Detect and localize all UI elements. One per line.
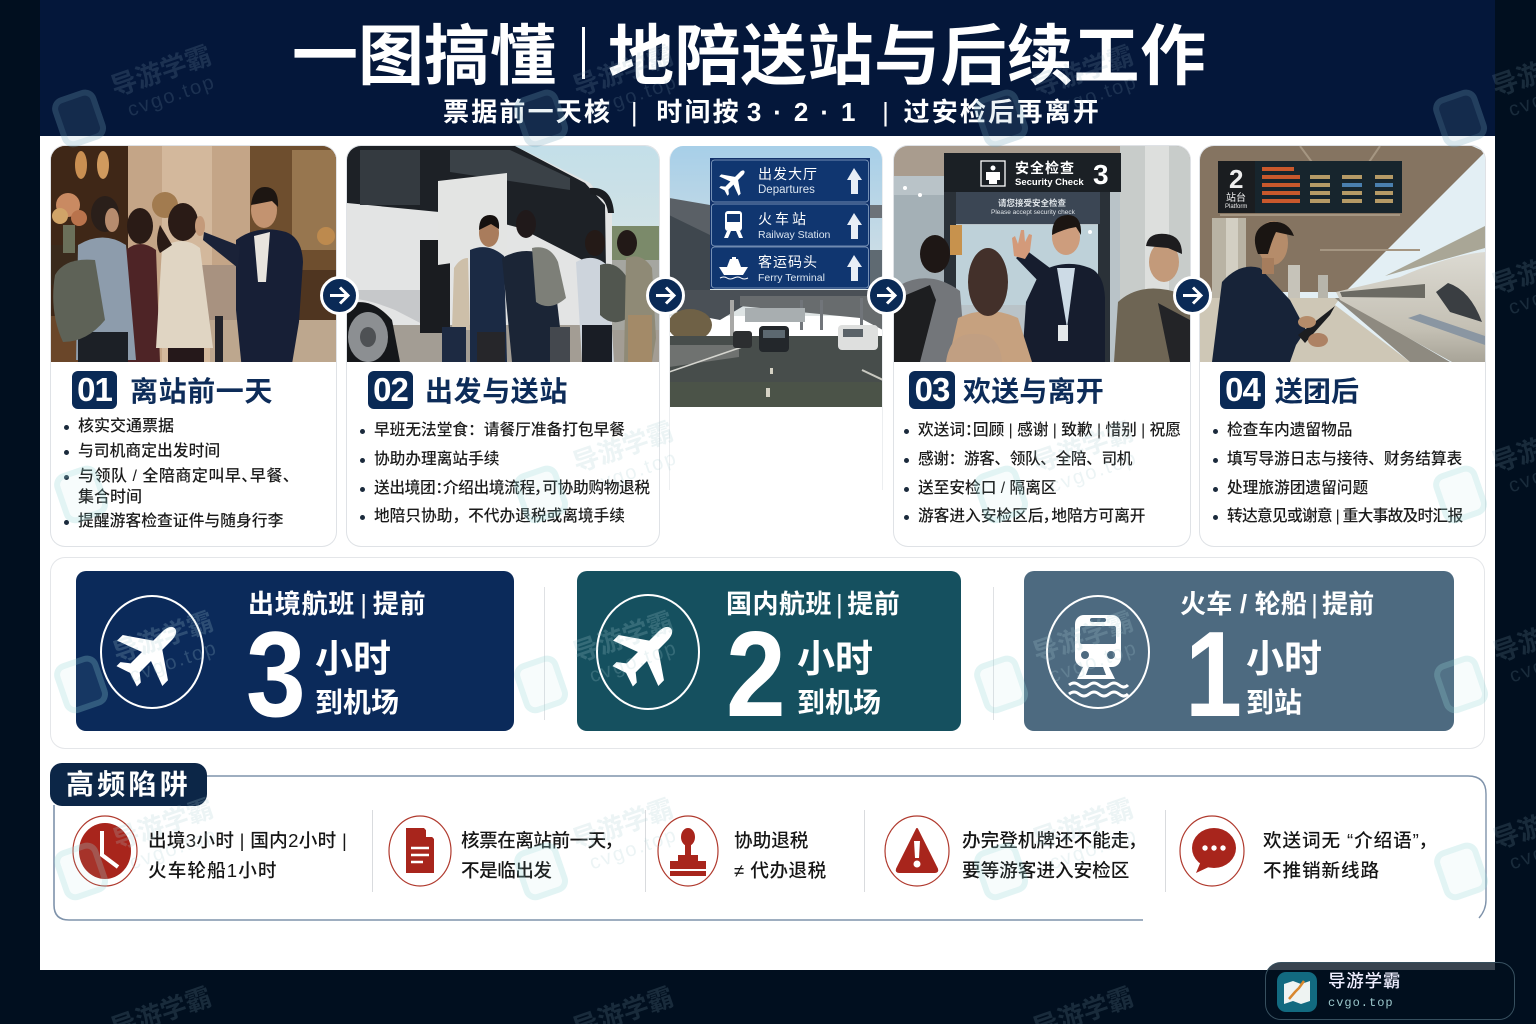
watermark row 3 c: cvgo.top (1047, 637, 1141, 687)
man 2 backpack (502, 251, 564, 362)
checklist: 集合时间 (78, 489, 142, 506)
pitfall 5 (1179, 815, 1430, 887)
watermark top 1: 导游学霸 (107, 40, 215, 102)
brand badge (1265, 962, 1515, 1020)
subtitle: | (882, 97, 889, 127)
watermark top 1: cvgo.top (125, 71, 219, 121)
number 1: 1 (1185, 606, 1242, 742)
destination: 到站 (1246, 687, 1302, 718)
watermark row 4 d (1424, 780, 1536, 930)
watermark row 2 a: 导游学霸 (569, 416, 677, 478)
photo: airport road with direction signs: Departures (758, 184, 815, 196)
photo: guide briefing group in hotel lobby (51, 146, 336, 362)
watermark row 3 c (964, 593, 1158, 743)
text (461, 830, 615, 881)
watermark top 2: 导游学霸 (569, 40, 677, 102)
heading: 出发与送站 (425, 376, 568, 407)
text (1263, 830, 1430, 881)
checklist (1213, 421, 1463, 525)
checklist: 感谢：游客、领队、全陪、司机 (918, 451, 1132, 468)
watermark row 3 b (504, 593, 698, 743)
dividers (372, 810, 373, 892)
woman (948, 311, 1032, 362)
man (76, 238, 136, 360)
badge 01: 01 (77, 371, 112, 408)
checklist: 送至安检口 / 隔离区 (918, 480, 1057, 497)
number 2: 2 (726, 606, 786, 742)
photo: guide waving at security check (894, 146, 1190, 362)
watermark top 2: cvgo.top (587, 71, 681, 121)
checklist (360, 421, 650, 525)
text: 火车轮船1小时 (148, 860, 278, 881)
photo: guide on train platform with tablet (1200, 146, 1485, 362)
guide (1022, 264, 1105, 362)
checklist: 核实交通票据 (78, 418, 174, 435)
time card: international flights 3 hours (76, 571, 514, 731)
suitcase (215, 316, 223, 362)
watermark row 2 b: cvgo.top (1047, 447, 1141, 497)
pitfall 1 (72, 815, 347, 887)
checklist: 送出境团：介绍出境流程，可协助购物退税 (374, 480, 650, 497)
photo: guide waving at security check: 安全检查 (1015, 160, 1075, 176)
watermark row 4 b: 导游学霸 (569, 793, 677, 855)
guide (236, 229, 303, 370)
photo: guide waving at security check: 请您接受安全检查 (998, 198, 1067, 208)
icon: plane (100, 595, 204, 709)
photo: guide waving at security check: Security Check (1015, 177, 1084, 188)
badge 02: 02 (373, 371, 408, 408)
watermark row 2 d (44, 403, 238, 553)
left man (896, 278, 966, 362)
checklist: 欢送词：回顾 | 感谢 | 致歉 | 惜别 | 祝愿 (918, 422, 1181, 439)
watermark row 4 a: cvgo.top (127, 824, 221, 874)
photo: guide on train platform with tablet: Platform (1225, 204, 1247, 210)
watermark row 4 c: cvgo.top (1047, 824, 1141, 874)
subtitle: | (631, 97, 638, 127)
text (734, 830, 827, 881)
photo: group boarding coach (347, 146, 659, 362)
woman cream (168, 340, 204, 362)
card 04: after the group leaves (1200, 146, 1485, 546)
title: 一图搞懂 地陪送站与后续工作 (292, 19, 1206, 93)
panel: common pitfalls (53, 775, 1487, 921)
icon: clock (72, 815, 138, 887)
text: 协助退税 (734, 830, 808, 851)
checklist: 填写导游日志与接待、财务结算表 (1227, 451, 1462, 468)
arrow 1 (320, 276, 359, 315)
text: 出境3小时 | 国内2小时 | (148, 830, 347, 851)
watermark row 4 c (964, 780, 1158, 930)
pitfalls tag: 高频陷阱 (66, 769, 191, 800)
icon: speech bubble (1179, 815, 1245, 887)
pitfall 4 (884, 815, 1139, 887)
sign group (710, 158, 870, 289)
panel: road signs photo (669, 146, 883, 490)
man navy (452, 258, 470, 330)
label: 火车 / 轮船|提前 (1180, 589, 1374, 619)
subtitle: 票据前一天核 时间按3·2·1 过安检后再离开 (443, 97, 1101, 127)
checklist: 游客进入安检区后，地陪方可离开 (918, 508, 1145, 525)
pitfall 2 (388, 815, 615, 887)
label: 出境航班|提前 (248, 589, 426, 619)
checklist: 协助办理离站手续 (374, 451, 500, 468)
cars (759, 326, 789, 352)
white content panel (40, 136, 1495, 970)
icon: brand map (1277, 972, 1317, 1012)
watermark row 3 a: 导游学霸 (109, 606, 217, 668)
brand name: 导游学霸 (1328, 971, 1401, 991)
watermark row 4 b: cvgo.top (587, 824, 681, 874)
watermark row 4 a: 导游学霸 (109, 793, 217, 855)
sign (944, 153, 1121, 192)
checklist: 与领队 / 全陪商定叫早、早餐、 (78, 468, 291, 485)
watermark row 3 a: cvgo.top (127, 637, 221, 687)
photo: airport road with direction signs: Railway Station (758, 229, 831, 241)
icon: stamp (657, 815, 719, 887)
frame (53, 775, 1487, 921)
destination: 到机场 (797, 687, 881, 718)
checklist (64, 417, 291, 530)
card 03: farewell and leaving (894, 146, 1190, 546)
checklist: 地陪只协助，不代办退税或离境手续 (374, 508, 625, 525)
card 01: before departure (51, 146, 336, 546)
right group (576, 258, 614, 362)
text: ≠ 代办退税 (734, 860, 827, 881)
unit: 小时 (1246, 639, 1322, 681)
arrow 4 (1173, 276, 1212, 315)
watermark row 3 a (44, 593, 238, 743)
pitfall 3 (657, 815, 827, 887)
label: 国内航班|提前 (726, 589, 900, 619)
board (1218, 161, 1255, 213)
pitfalls tag (50, 763, 207, 806)
unit: 小时 (797, 639, 873, 681)
heading: 离站前一天 (130, 376, 273, 407)
icon: document (388, 815, 452, 887)
number 3: 3 (246, 606, 306, 742)
text: 不推销新线路 (1263, 860, 1380, 881)
watermark bottom row (0, 984, 1536, 1024)
right man (1114, 289, 1190, 362)
photo: airport road with direction signs: 出发大厅 (758, 166, 818, 182)
photo: airport road with direction signs: 客运码头 (758, 254, 818, 270)
photo: airport road with direction signs (670, 146, 882, 407)
watermark top 1 (52, 40, 219, 148)
panel: arrival time rules (51, 558, 1484, 748)
heading: 欢送与离开 (963, 376, 1104, 407)
text: 不是临出发 (461, 860, 551, 881)
card 02: departure and send-off (347, 146, 659, 546)
watermark row 4 b (504, 780, 698, 930)
watermark row 2 a (504, 403, 698, 553)
text: 欢送词无 “介绍语”， (1263, 830, 1430, 851)
photo: guide on train platform with tablet: 站台 (1226, 191, 1246, 204)
brand url: cvgo.top (1328, 996, 1394, 1010)
badge 04: 04 (1225, 371, 1260, 408)
badge 03: 03 (915, 371, 949, 408)
watermark row 2 b: 导游学霸 (1029, 416, 1137, 478)
text: 核票在离站前一天， (461, 830, 615, 851)
watermark top 3: cvgo.top (1047, 71, 1141, 121)
icon: train on waves (1046, 595, 1150, 709)
watermark top 3: 导游学霸 (1029, 40, 1137, 102)
watermark top 3 (964, 27, 1158, 177)
watermark row 3 b: cvgo.top (587, 637, 681, 687)
destination: 到机场 (315, 687, 399, 718)
watermark row 3 b: 导游学霸 (569, 606, 677, 668)
text: 办完登机牌还不能走， (962, 830, 1139, 851)
checklist (904, 421, 1181, 525)
watermark row 4 a (44, 780, 238, 930)
watermark right 2 (1423, 225, 1536, 375)
checklist: 早班无法堂食：请餐厅准备打包早餐 (374, 422, 625, 439)
photo: airport road with direction signs: 火车站 (758, 211, 809, 227)
heading: 送团后 (1275, 376, 1359, 407)
header band (40, 0, 1495, 136)
man (1212, 267, 1306, 362)
watermark row 2 a: cvgo.top (587, 447, 681, 497)
text (148, 830, 347, 881)
time card: train and ferry 1 hour (1024, 571, 1454, 731)
checklist: 处理旅游团遗留问题 (1227, 480, 1368, 497)
arrow 3 (867, 276, 906, 314)
unit: 小时 (315, 639, 391, 681)
woman red (126, 244, 160, 362)
icon: warning triangle (884, 815, 950, 887)
watermark top 2 (504, 27, 698, 177)
photo: airport road with direction signs: Ferry Terminal (758, 272, 825, 284)
photo: guide waving at security check: 3 (1093, 159, 1109, 190)
checklist: 与司机商定出发时间 (78, 443, 220, 460)
photo: guide on train platform with tablet: 2 (1229, 164, 1243, 194)
watermark row 4 c: 导游学霸 (1029, 793, 1137, 855)
time card: domestic flights 2 hours (577, 571, 961, 731)
checklist: 提醒游客检查证件与随身行李 (78, 513, 283, 530)
text (962, 830, 1139, 881)
watermark row 2 b (964, 403, 1158, 553)
photo: guide waving at security check: Please accept security check (991, 209, 1076, 216)
checklist: 检查车内遗留物品 (1227, 422, 1352, 439)
watermark row 3 d (1424, 593, 1536, 743)
arrow 2 (646, 276, 685, 314)
text: 要等游客进入安检区 (962, 860, 1129, 881)
icon: plane (596, 594, 700, 710)
watermark row 2 c (1423, 403, 1536, 553)
checklist: 转达意见或谢意 | 重大事故及时汇报 (1227, 508, 1463, 525)
watermark top 4 (1423, 27, 1536, 177)
watermark row 3 c: 导游学霸 (1029, 606, 1137, 668)
